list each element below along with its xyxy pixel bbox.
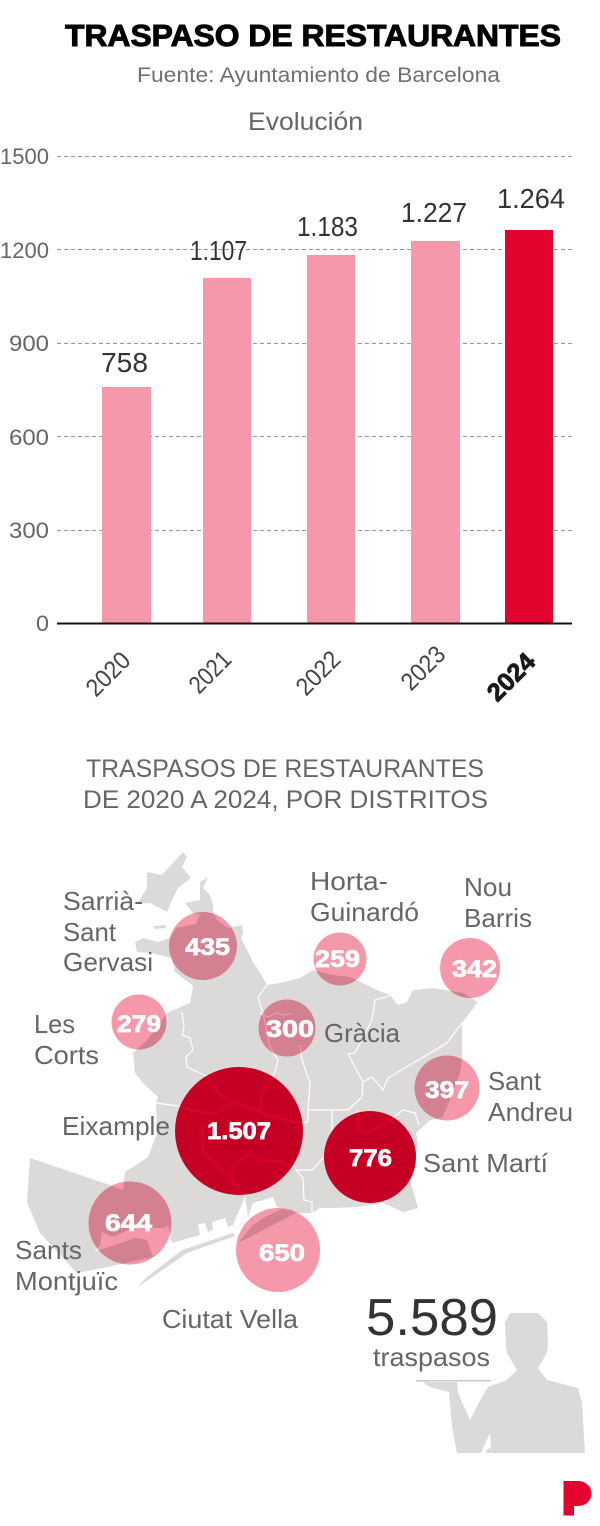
bar value labels: 1.264 bbox=[497, 183, 565, 214]
district circles bbox=[88, 912, 500, 1292]
year labels: 2024 bbox=[482, 648, 541, 707]
year labels: 2020 bbox=[80, 646, 136, 702]
year labels: 2021 bbox=[183, 645, 237, 699]
circle values: 644 bbox=[105, 1210, 153, 1237]
district labels: Sant bbox=[488, 1066, 542, 1096]
district labels: Sant bbox=[63, 917, 117, 947]
year labels: 2022 bbox=[290, 645, 346, 701]
circle values: 1.507 bbox=[207, 1118, 271, 1145]
year labels: 2023 bbox=[395, 640, 451, 696]
district labels: Corts bbox=[34, 1040, 99, 1070]
circle values: 397 bbox=[425, 1077, 469, 1104]
total figure: 5.589 bbox=[366, 1289, 498, 1347]
district labels: Sants bbox=[15, 1235, 82, 1265]
y axis labels bbox=[0, 144, 49, 636]
y axis labels: 300 bbox=[9, 518, 49, 543]
y axis labels: 600 bbox=[9, 425, 49, 450]
circle values bbox=[105, 934, 497, 1267]
district labels: Gràcia bbox=[324, 1018, 401, 1048]
map of Barcelona districts bbox=[27, 852, 478, 1287]
title: TRASPASO DE RESTAURANTES bbox=[65, 18, 561, 53]
circle values: 259 bbox=[315, 946, 360, 973]
chart heading: Evolución bbox=[248, 108, 363, 136]
y axis labels: 1500 bbox=[0, 144, 49, 169]
bar value labels: 1.107 bbox=[190, 235, 247, 266]
district labels: Eixample bbox=[62, 1111, 170, 1141]
icon: waiter silhouette with tray bbox=[416, 1313, 585, 1453]
total figure bbox=[366, 1289, 498, 1372]
logo bbox=[564, 1481, 592, 1516]
bars bbox=[102, 230, 553, 623]
circle values: 776 bbox=[349, 1145, 392, 1172]
circle values: 279 bbox=[117, 1011, 161, 1038]
y axis labels: 1200 bbox=[0, 238, 49, 263]
district labels: Nou bbox=[464, 872, 512, 902]
district labels: Horta- bbox=[310, 866, 388, 896]
total figure: traspasos bbox=[373, 1342, 490, 1372]
district labels: Sarrià- bbox=[63, 886, 143, 916]
y axis labels: 900 bbox=[9, 331, 49, 356]
circle values: 300 bbox=[266, 1016, 314, 1043]
circle values: 650 bbox=[259, 1240, 305, 1267]
circle values: 435 bbox=[185, 934, 230, 961]
district labels: Barris bbox=[464, 903, 532, 933]
district labels: Ciutat Vella bbox=[162, 1304, 299, 1334]
bar chart: evolution bbox=[0, 144, 573, 707]
district labels: Sant Martí bbox=[423, 1148, 549, 1178]
district labels bbox=[15, 866, 573, 1334]
map heading bbox=[83, 755, 488, 814]
bar value labels: 758 bbox=[101, 347, 148, 378]
district boundaries bbox=[156, 985, 462, 1215]
map heading: DE 2020 A 2024, POR DISTRITOS bbox=[83, 786, 488, 814]
bar value labels bbox=[101, 183, 565, 378]
y axis labels: 0 bbox=[36, 611, 49, 636]
bar value labels: 1.227 bbox=[401, 197, 467, 228]
district labels: Gervasi bbox=[63, 947, 153, 977]
district labels: Les bbox=[34, 1009, 75, 1039]
district labels: Montjuïc bbox=[15, 1266, 118, 1296]
source line: Fuente: Ayuntamiento de Barcelona bbox=[137, 64, 500, 87]
year labels bbox=[80, 640, 541, 707]
district labels: Guinardó bbox=[310, 897, 419, 927]
district labels: Andreu bbox=[488, 1097, 573, 1127]
circle values: 342 bbox=[452, 956, 497, 983]
map heading: TRASPASOS DE RESTAURANTES bbox=[86, 755, 484, 783]
bar value labels: 1.183 bbox=[297, 211, 358, 242]
